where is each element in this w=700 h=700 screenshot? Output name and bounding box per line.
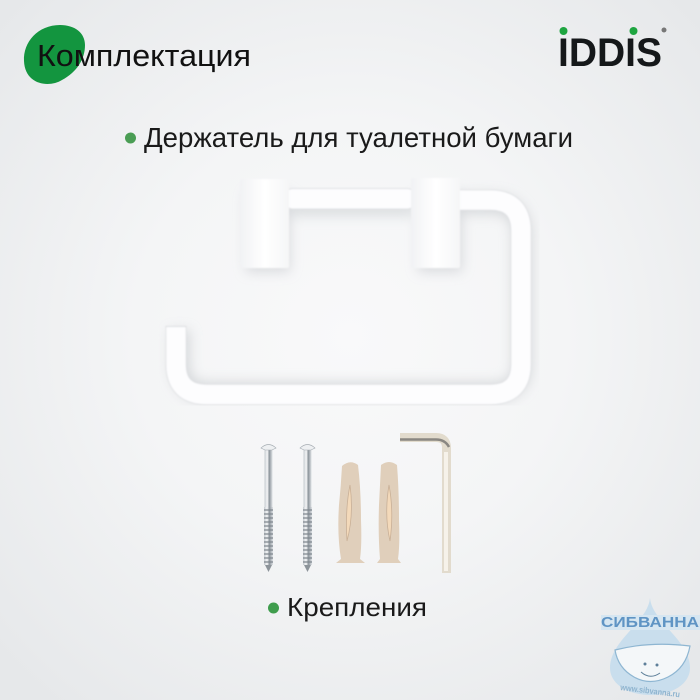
label text: Держатель для туалетной бумаги (144, 122, 573, 153)
drop (610, 598, 690, 695)
holder crossbar (284, 188, 416, 209)
right post (411, 178, 460, 268)
holder loop (176, 200, 521, 394)
bullet (268, 602, 279, 614)
band behind text (601, 615, 700, 630)
wall plug 2 (377, 462, 401, 563)
bathtub face (641, 662, 660, 676)
heading text: Комплектация (37, 38, 251, 73)
heading: Комплектация (24, 25, 251, 84)
product: toilet paper holder (176, 178, 522, 394)
logo dots (560, 27, 638, 35)
label: fasteners (268, 592, 427, 622)
icon: bathtub (615, 644, 690, 682)
wall plug 1 (336, 462, 365, 563)
screw 2 (300, 444, 315, 572)
logo: IDDIS (558, 27, 666, 75)
hex key (400, 438, 449, 573)
screw 1 (261, 444, 276, 572)
icon: green blob (24, 25, 85, 84)
holder loop rim (176, 200, 521, 394)
watermark text: СИБВАННА (601, 615, 700, 631)
fasteners (261, 438, 449, 573)
logo text: IDDIS (558, 31, 662, 75)
label text: Крепления (287, 592, 427, 622)
holder shadows (180, 192, 522, 392)
bullet (125, 132, 136, 144)
logo registered mark (662, 28, 666, 32)
watermark url: www.sibvanna.ru (619, 682, 681, 699)
watermark: Сибванна (601, 598, 700, 699)
left post (240, 179, 289, 268)
label: holder (125, 122, 573, 153)
